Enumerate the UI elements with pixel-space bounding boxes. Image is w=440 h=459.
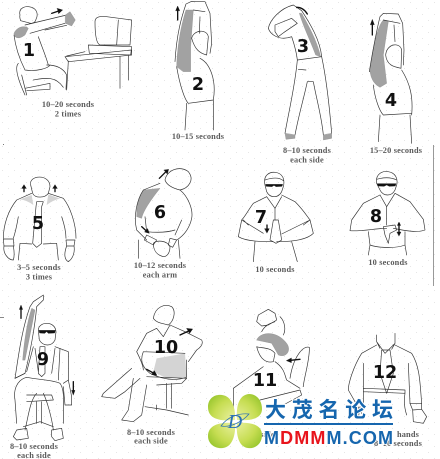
watermark title: 大茂名论坛 [265, 399, 393, 422]
figure 7 drawing [238, 172, 313, 262]
caption 6: each arm [143, 270, 177, 280]
exercise 1: seated arm reach at desk [14, 7, 132, 118]
caption 6: 10–12 seconds [134, 261, 186, 270]
caption 12: hands [397, 430, 420, 439]
figure 10 drawing [102, 305, 202, 422]
number 5: 5 [32, 214, 44, 234]
caption 10: each side [134, 436, 168, 446]
exercise 2: overhead arm stretch [172, 1, 225, 141]
figure 2 drawing [175, 1, 214, 130]
caption 4: 15–20 seconds [370, 146, 423, 155]
number 1: 1 [23, 41, 35, 61]
figure 8 drawing [350, 171, 425, 255]
caption 5: 3–5 seconds [17, 263, 61, 272]
exercise 10: seated twist, legs crossed [102, 305, 202, 446]
figure 3 drawing [268, 5, 332, 140]
figure 6 drawing [135, 169, 192, 258]
number 11: 11 [253, 371, 277, 391]
watermark logo [208, 394, 393, 448]
caption 9: 8–10 seconds [10, 442, 58, 451]
number 6: 6 [154, 203, 166, 223]
caption 3: 8–10 seconds [283, 146, 331, 155]
number 8: 8 [370, 207, 382, 227]
caption 1: 10–20 seconds [42, 100, 94, 109]
exercise 11: seated elbow pull behind head [233, 309, 309, 439]
number 9: 9 [37, 350, 49, 370]
caption 7: 10 seconds [255, 265, 295, 274]
number 10: 10 [154, 338, 178, 358]
figure 1 drawing [14, 7, 132, 95]
number 2: 2 [192, 75, 204, 95]
caption 12 duration: 8–10 seconds [374, 439, 423, 448]
exercise 5: shoulder shrug [3, 177, 76, 282]
number 4: 4 [385, 91, 397, 111]
figure 11 drawing [233, 309, 309, 410]
exercise 12: shake hands [348, 333, 427, 448]
caption 8: 10 seconds [368, 258, 408, 267]
watermark URL: MDMMM.COM [264, 428, 393, 448]
exercise 9: seated one-arm reach [10, 295, 75, 459]
caption 5: 3 times [26, 272, 53, 282]
caption 2: 10–15 seconds [172, 132, 225, 141]
clover icon [208, 394, 262, 448]
number 7: 7 [255, 208, 267, 228]
watermark rule [264, 423, 393, 425]
exercise 8: palms together rotated [350, 171, 425, 267]
script letter D: D [227, 411, 243, 433]
figure 4 drawing [369, 13, 412, 143]
figure 9 drawing [13, 295, 75, 441]
number 3: 3 [297, 37, 309, 57]
caption 1: 2 times [55, 110, 82, 118]
partly hidden caption 11: each side [241, 430, 275, 439]
exercise 3: standing side bend [268, 5, 332, 164]
exercise 4: overhead stretch, longer hold [369, 13, 423, 155]
exercise 6: arm behind back with head tilt [134, 169, 192, 280]
exercise 7: palms together pressing down [238, 172, 313, 274]
number 12: 12 [373, 363, 397, 383]
figure 12 drawing [348, 333, 427, 423]
caption 10: 8–10 seconds [127, 428, 175, 437]
figure 5 drawing [3, 177, 76, 262]
caption 3: each side [290, 156, 324, 164]
